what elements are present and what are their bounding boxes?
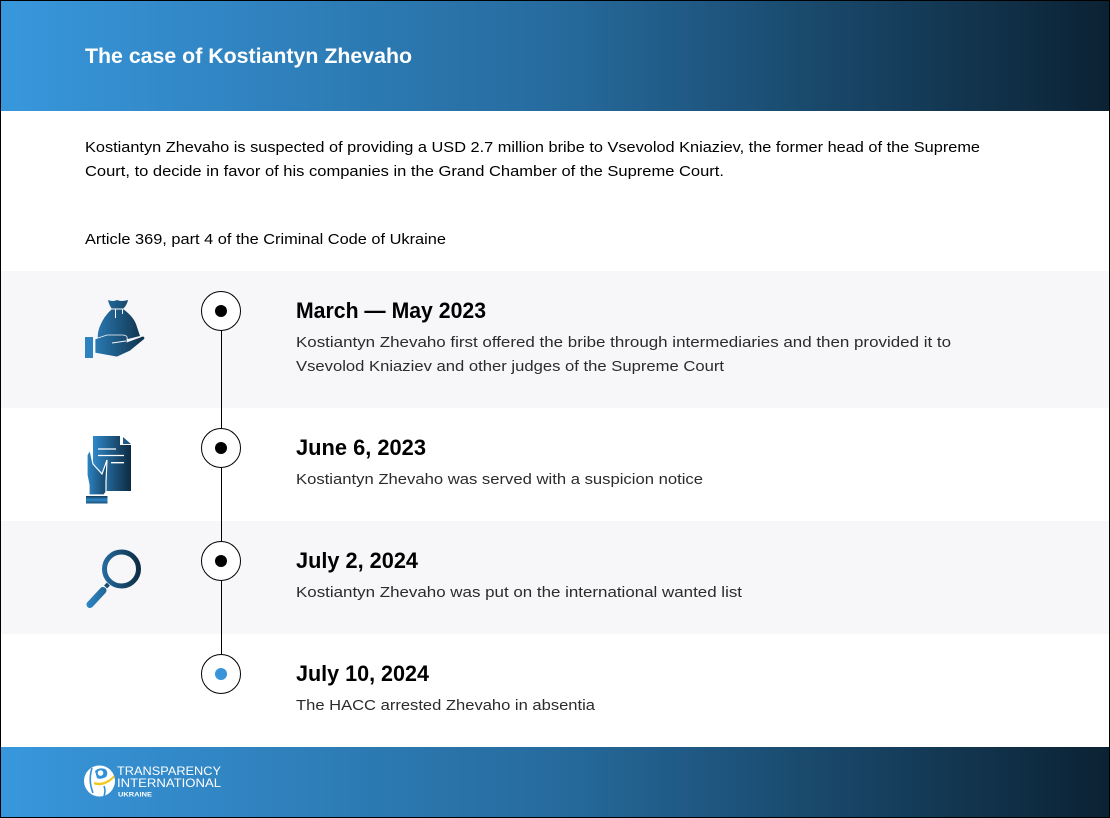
marker xyxy=(202,292,240,330)
logo: Transparency International Ukraine: INTERNATIONAL xyxy=(117,776,221,790)
intro paragraph xyxy=(85,139,980,180)
logo: Transparency International Ukraine: TRANSPARENCY xyxy=(117,764,221,778)
timeline entry: July 10, 2024 xyxy=(202,654,596,714)
title: The case of Kostiantyn Zhevaho xyxy=(85,45,412,68)
marker xyxy=(202,654,240,694)
marker xyxy=(202,428,240,468)
timeline axis xyxy=(221,330,222,655)
description xyxy=(296,334,951,375)
footer banner xyxy=(1,747,1109,817)
intro paragraph: Court, to decide in favor of his companies in the Grand Chamber of the Supreme Court. xyxy=(85,163,724,180)
band: March to May 2023 xyxy=(1,271,1109,408)
description: The HACC arrested Zhevaho in absentia xyxy=(296,697,596,714)
logo: Transparency International Ukraine xyxy=(84,764,221,798)
description: Kostiantyn Zhevaho was served with a suspicion notice xyxy=(296,471,703,488)
description: Vsevolod Kniaziev and other judges of the Supreme Court xyxy=(296,358,725,375)
timeline entry: March to May 2023 xyxy=(202,292,951,375)
intro paragraph: Kostiantyn Zhevaho is suspected of providing a USD 2.7 million bribe to Vsevolod Kniaziev, the former head of the Supreme xyxy=(85,139,980,156)
date: July 2, 2024 xyxy=(296,548,419,573)
date: July 10, 2024 xyxy=(296,661,430,686)
date: June 6, 2023 xyxy=(296,435,426,460)
marker xyxy=(202,542,240,580)
date: March — May 2023 xyxy=(296,298,486,323)
header banner xyxy=(1,1,1109,111)
timeline entry: June 6, 2023 xyxy=(202,428,703,488)
icon: magnifying glass xyxy=(90,552,138,604)
icon: money bag on hand xyxy=(85,300,145,358)
description: Kostiantyn Zhevaho first offered the bribe through intermediaries and then provided it to xyxy=(296,334,951,351)
icon: hand holding document xyxy=(86,436,131,504)
article reference: Article 369, part 4 of the Criminal Code of Ukraine xyxy=(85,231,446,248)
band: July 2, 2024 xyxy=(1,521,1109,634)
description: Kostiantyn Zhevaho was put on the international wanted list xyxy=(296,584,743,601)
logo emblem xyxy=(84,766,115,796)
logo: Transparency International Ukraine: UKRAINE xyxy=(118,792,153,798)
timeline entry: July 2, 2024 xyxy=(202,542,743,601)
